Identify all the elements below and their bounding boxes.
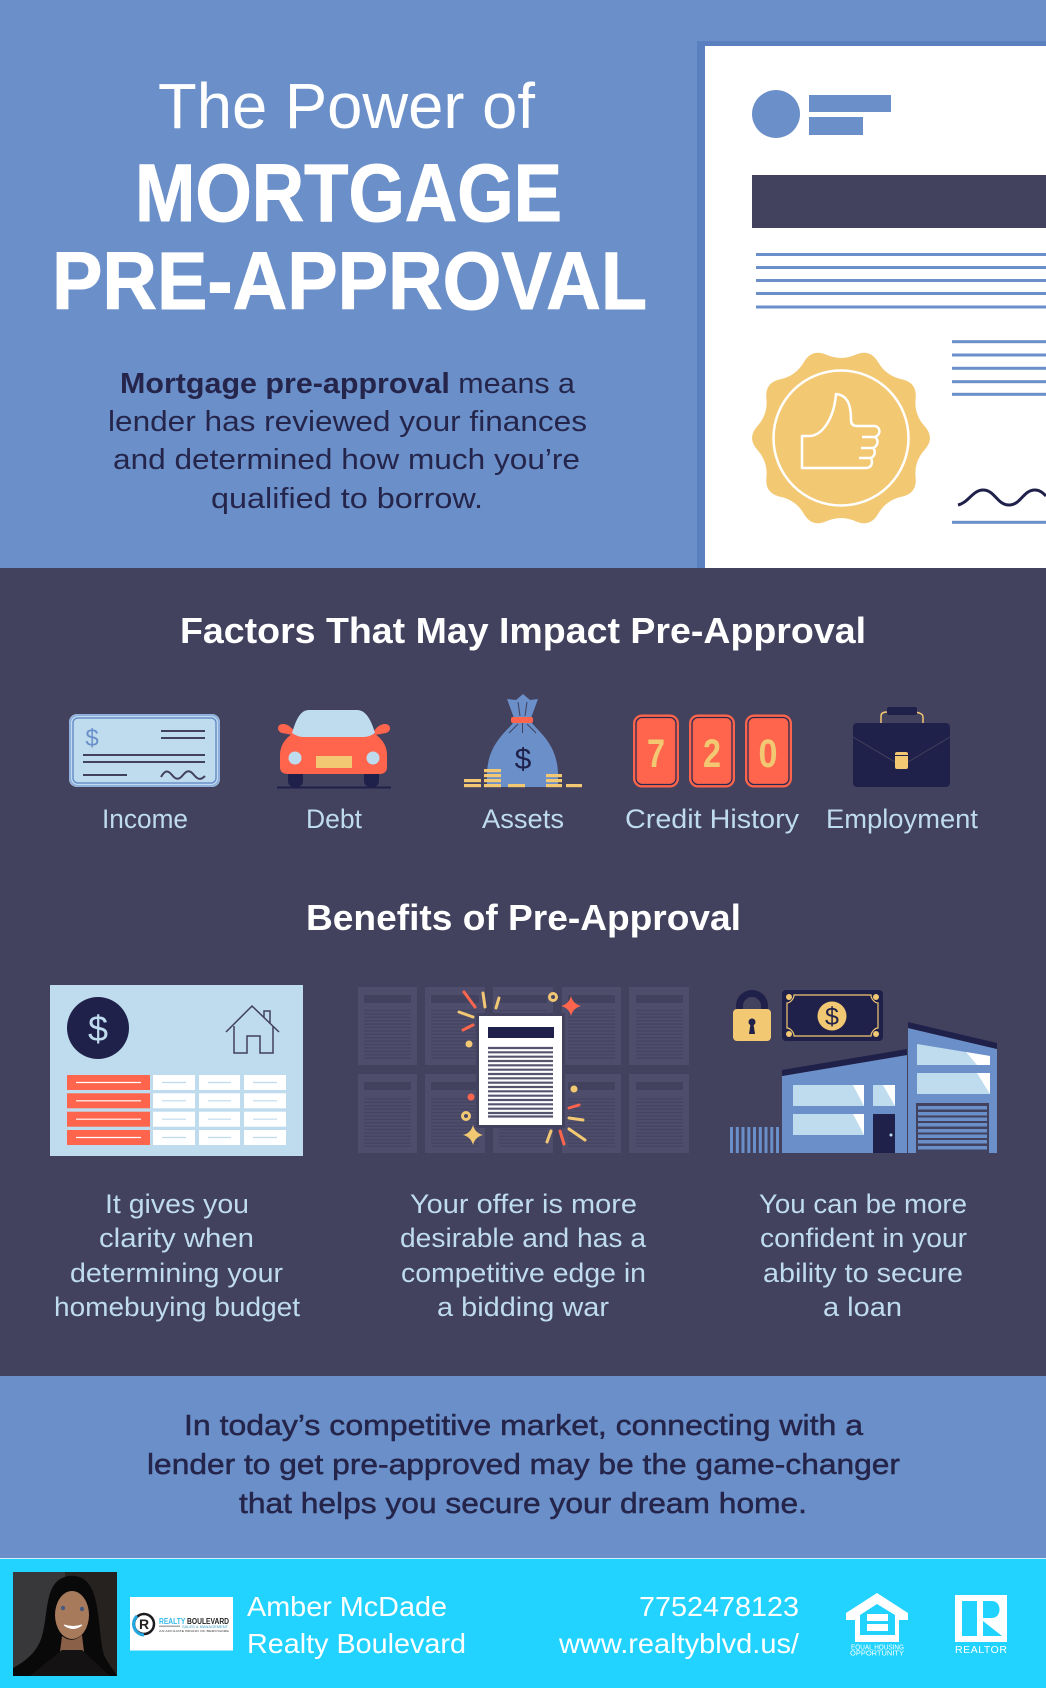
icon: realtor: REALTOR (955, 1644, 1007, 1656)
brokerage logo: SALES & MANAGEMENT (182, 1625, 229, 1629)
closing text (147, 1410, 900, 1520)
brokerage logo: REALTY BOULEVARD (159, 1617, 229, 1626)
benefit text 1: clarity when (99, 1223, 254, 1253)
icon: fence (732, 1127, 778, 1153)
icon: income cheque: $ (85, 725, 99, 752)
benefit text 2: Your offer is more (410, 1189, 637, 1219)
contact details: 7752478123 (639, 1591, 799, 1622)
panel: closing statement (0, 1376, 1046, 1558)
icon: approval seal with thumbs up (752, 353, 930, 523)
document illustration (697, 41, 1046, 568)
icon: signature (958, 490, 1046, 505)
icon: equal housing opportunity (846, 1593, 908, 1658)
agent name and brokerage (247, 1591, 466, 1659)
icon: padlock (733, 993, 771, 1041)
benefit text 2: a bidding war (437, 1292, 609, 1322)
icon: debt car (277, 710, 391, 788)
contact details: www.realtyblvd.us/ (558, 1628, 799, 1659)
icon: equal housing opportunity: EQUAL HOUSING (851, 1644, 904, 1652)
benefit text 1: It gives you (105, 1189, 249, 1219)
icon: banknote (782, 990, 883, 1041)
intro text: lender has reviewed your finances (108, 406, 587, 438)
heading: benefits: Benefits of Pre-Approval (306, 897, 741, 938)
benefit 2: standout document illustration (358, 987, 689, 1153)
benefit 1: budget illustration: $ (88, 1008, 108, 1049)
label: debt: Debt (306, 804, 362, 834)
icon: credit score 720: 7 (647, 732, 665, 776)
benefit text 3: You can be more (759, 1189, 967, 1219)
agent name and brokerage: Realty Boulevard (247, 1628, 466, 1659)
panel: header (0, 0, 1046, 568)
label: employment: Employment (826, 804, 978, 834)
icon: credit score 720 (633, 714, 792, 788)
closing text: that helps you secure your dream home. (239, 1488, 807, 1520)
intro text: and determined how much you’re (113, 444, 580, 476)
intro text (108, 368, 587, 515)
benefit text 1: homebuying budget (54, 1292, 301, 1322)
closing text: lender to get pre-approved may be the game-changer (147, 1449, 900, 1481)
icon: income cheque (69, 714, 220, 787)
agent photo (13, 1572, 117, 1676)
icon: realtor (955, 1595, 1007, 1656)
agent name and brokerage: Amber McDade (247, 1591, 447, 1622)
icon: house (782, 1022, 997, 1153)
contact details (558, 1591, 799, 1659)
panel: factors and benefits (0, 568, 1046, 1376)
brokerage logo: R (139, 1616, 149, 1632)
benefit text 2: competitive edge in (401, 1258, 646, 1288)
intro text: Mortgage pre-approval means a (120, 368, 576, 400)
brokerage logo (130, 1597, 233, 1650)
icon: banknote: $ (825, 1003, 839, 1031)
benefit text 1: determining your (70, 1258, 283, 1288)
benefit text 3 (759, 1189, 967, 1322)
icon: equal housing opportunity: OPPORTUNITY (850, 1650, 904, 1658)
icon: credit score 720: 2 (703, 732, 721, 776)
icon: assets money bag (464, 694, 582, 787)
icon: credit score 720: 0 (758, 732, 778, 776)
benefit text 1 (54, 1189, 301, 1322)
title: The Power of (158, 70, 535, 142)
title: PRE-APPROVAL (52, 236, 647, 327)
benefit text 3: confident in your (760, 1223, 967, 1253)
benefit text 3: a loan (823, 1292, 902, 1322)
benefit text 2: desirable and has a (400, 1223, 647, 1253)
closing text: In today’s competitive market, connecting with a (184, 1410, 864, 1442)
benefit 3: house, lock and cash illustration (732, 990, 997, 1153)
brokerage logo: AN AFFILIATE BRAND OF BERKSHIRE (159, 1629, 229, 1633)
panel: agent footer (0, 1558, 1046, 1688)
intro text: qualified to borrow. (211, 483, 483, 515)
label: income: Income (102, 804, 188, 834)
benefit 1: budget illustration (50, 985, 303, 1156)
title: MORTGAGE (135, 148, 562, 239)
benefit text 3: ability to secure (763, 1258, 963, 1288)
icon: assets money bag: $ (515, 743, 532, 776)
heading: factors: Factors That May Impact Pre-Approval (180, 610, 866, 651)
label: assets: Assets (482, 804, 564, 834)
label: credit history: Credit History (625, 804, 800, 834)
benefit text 2 (400, 1189, 647, 1322)
title (52, 70, 647, 327)
icon: employment briefcase (853, 707, 950, 787)
